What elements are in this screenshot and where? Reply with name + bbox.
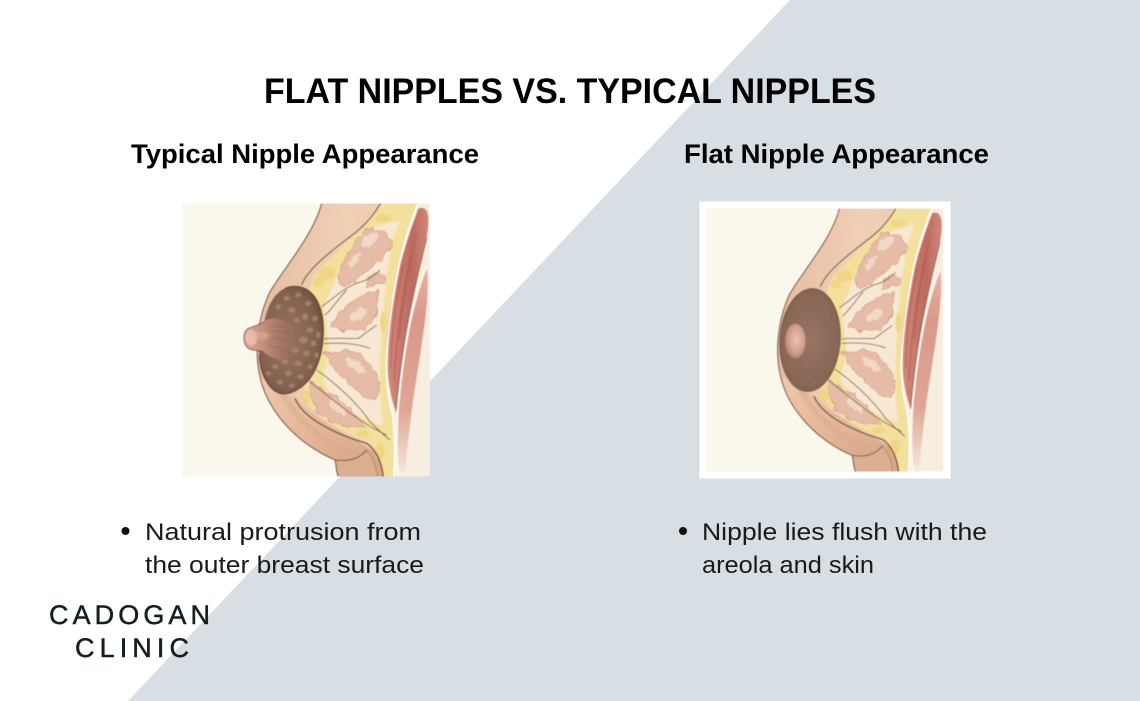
protruding nipple bbox=[244, 318, 300, 360]
flat nipple bbox=[785, 324, 806, 358]
logo: Cadogan Clinic: CADOGAN bbox=[49, 600, 210, 630]
bullet text: flat: areola and skin bbox=[702, 552, 874, 579]
logo: Cadogan Clinic bbox=[49, 600, 210, 663]
white photo frame bbox=[700, 202, 950, 478]
areola with raised bumps bbox=[259, 286, 323, 394]
title: FLAT NIPPLES VS. TYPICAL NIPPLES bbox=[264, 72, 876, 111]
heading: typical nipple appearance: Typical Nipple Appearance bbox=[131, 139, 479, 169]
bullet text: typical bbox=[122, 519, 424, 579]
bullet text: typical: the outer breast surface bbox=[145, 552, 424, 579]
illustration: flat nipple cross-section bbox=[700, 202, 950, 478]
smooth areola bbox=[776, 286, 844, 394]
heading: flat nipple appearance: Flat Nipple Appearance bbox=[684, 139, 989, 169]
bullet text: flat bbox=[679, 519, 987, 579]
bullet text: typical: Natural protrusion from bbox=[145, 519, 421, 546]
logo: Cadogan Clinic: CLINIC bbox=[75, 633, 189, 663]
illustration: typical nipple cross-section bbox=[182, 203, 430, 477]
bullet text: flat: Nipple lies flush with the bbox=[702, 519, 987, 546]
